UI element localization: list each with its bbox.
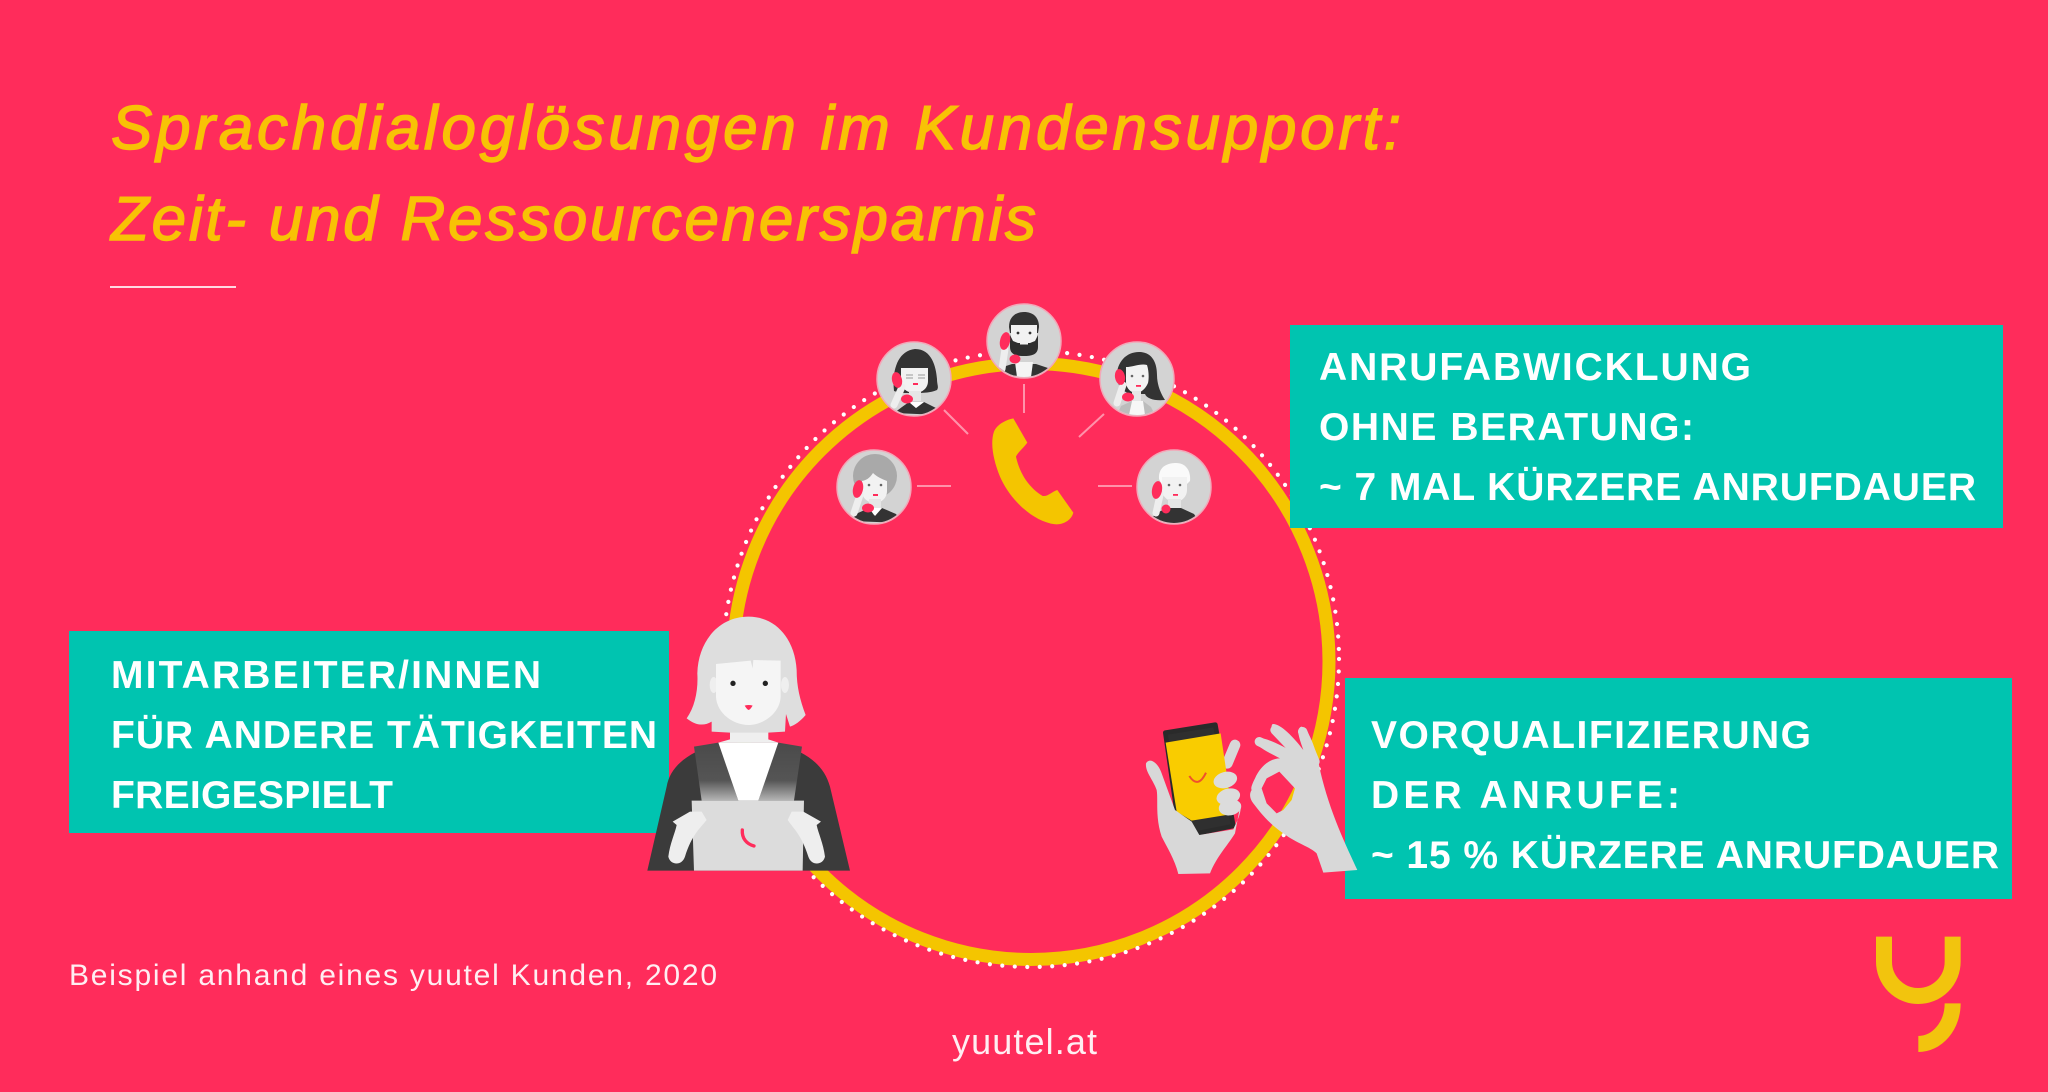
title (109, 94, 1401, 254)
illustration: agent with tablet (647, 617, 850, 871)
title: Sprachdialoglösungen im Kundensupport: (111, 94, 1401, 163)
panel: employees freed: FREIGESPIELT (111, 774, 393, 817)
yellow ring with dotted outline (723, 351, 1339, 967)
avatar: woman with long dark hair (1100, 342, 1174, 416)
title: Zeit- und Ressourcenersparnis (109, 185, 1036, 254)
icon: yellow phone handset (992, 418, 1073, 524)
footnote: Beispiel anhand eines yuutel Kunden, 2020 (69, 959, 717, 992)
panel: call handling: ~ 7 MAL KÜRZERE ANRUFDAUER (1319, 466, 1976, 509)
panel: employees freed: MITARBEITER/INNEN (111, 654, 541, 697)
avatar: white-haired man (1137, 450, 1211, 524)
avatar: woman with black bob (877, 342, 951, 416)
panel: call handling (1290, 325, 2003, 528)
spokes from phone to callers (917, 384, 1132, 486)
panel: employees freed: FÜR ANDERE TÄTIGKEITEN (111, 714, 657, 757)
logo: yuutel y (1884, 937, 1953, 1044)
panel: pre-qualification (1345, 678, 2012, 899)
panel: pre-qualification: DER ANRUFE: (1371, 774, 1680, 817)
avatar: woman with grey curly hair (837, 450, 911, 524)
avatar: bearded man (987, 304, 1061, 378)
illustration: OK hand gesture (1250, 724, 1357, 873)
panel: call handling: OHNE BERATUNG: (1319, 406, 1694, 449)
panel: call handling: ANRUFABWICKLUNG (1319, 346, 1751, 389)
website url: yuutel.at (952, 1021, 1097, 1062)
panel: pre-qualification: VORQUALIFIZIERUNG (1371, 714, 1811, 757)
illustration: phone in hand (1146, 725, 1243, 874)
panel: employees freed (69, 631, 669, 833)
panel: pre-qualification: ~ 15 % KÜRZERE ANRUFDAUER (1371, 834, 1999, 877)
